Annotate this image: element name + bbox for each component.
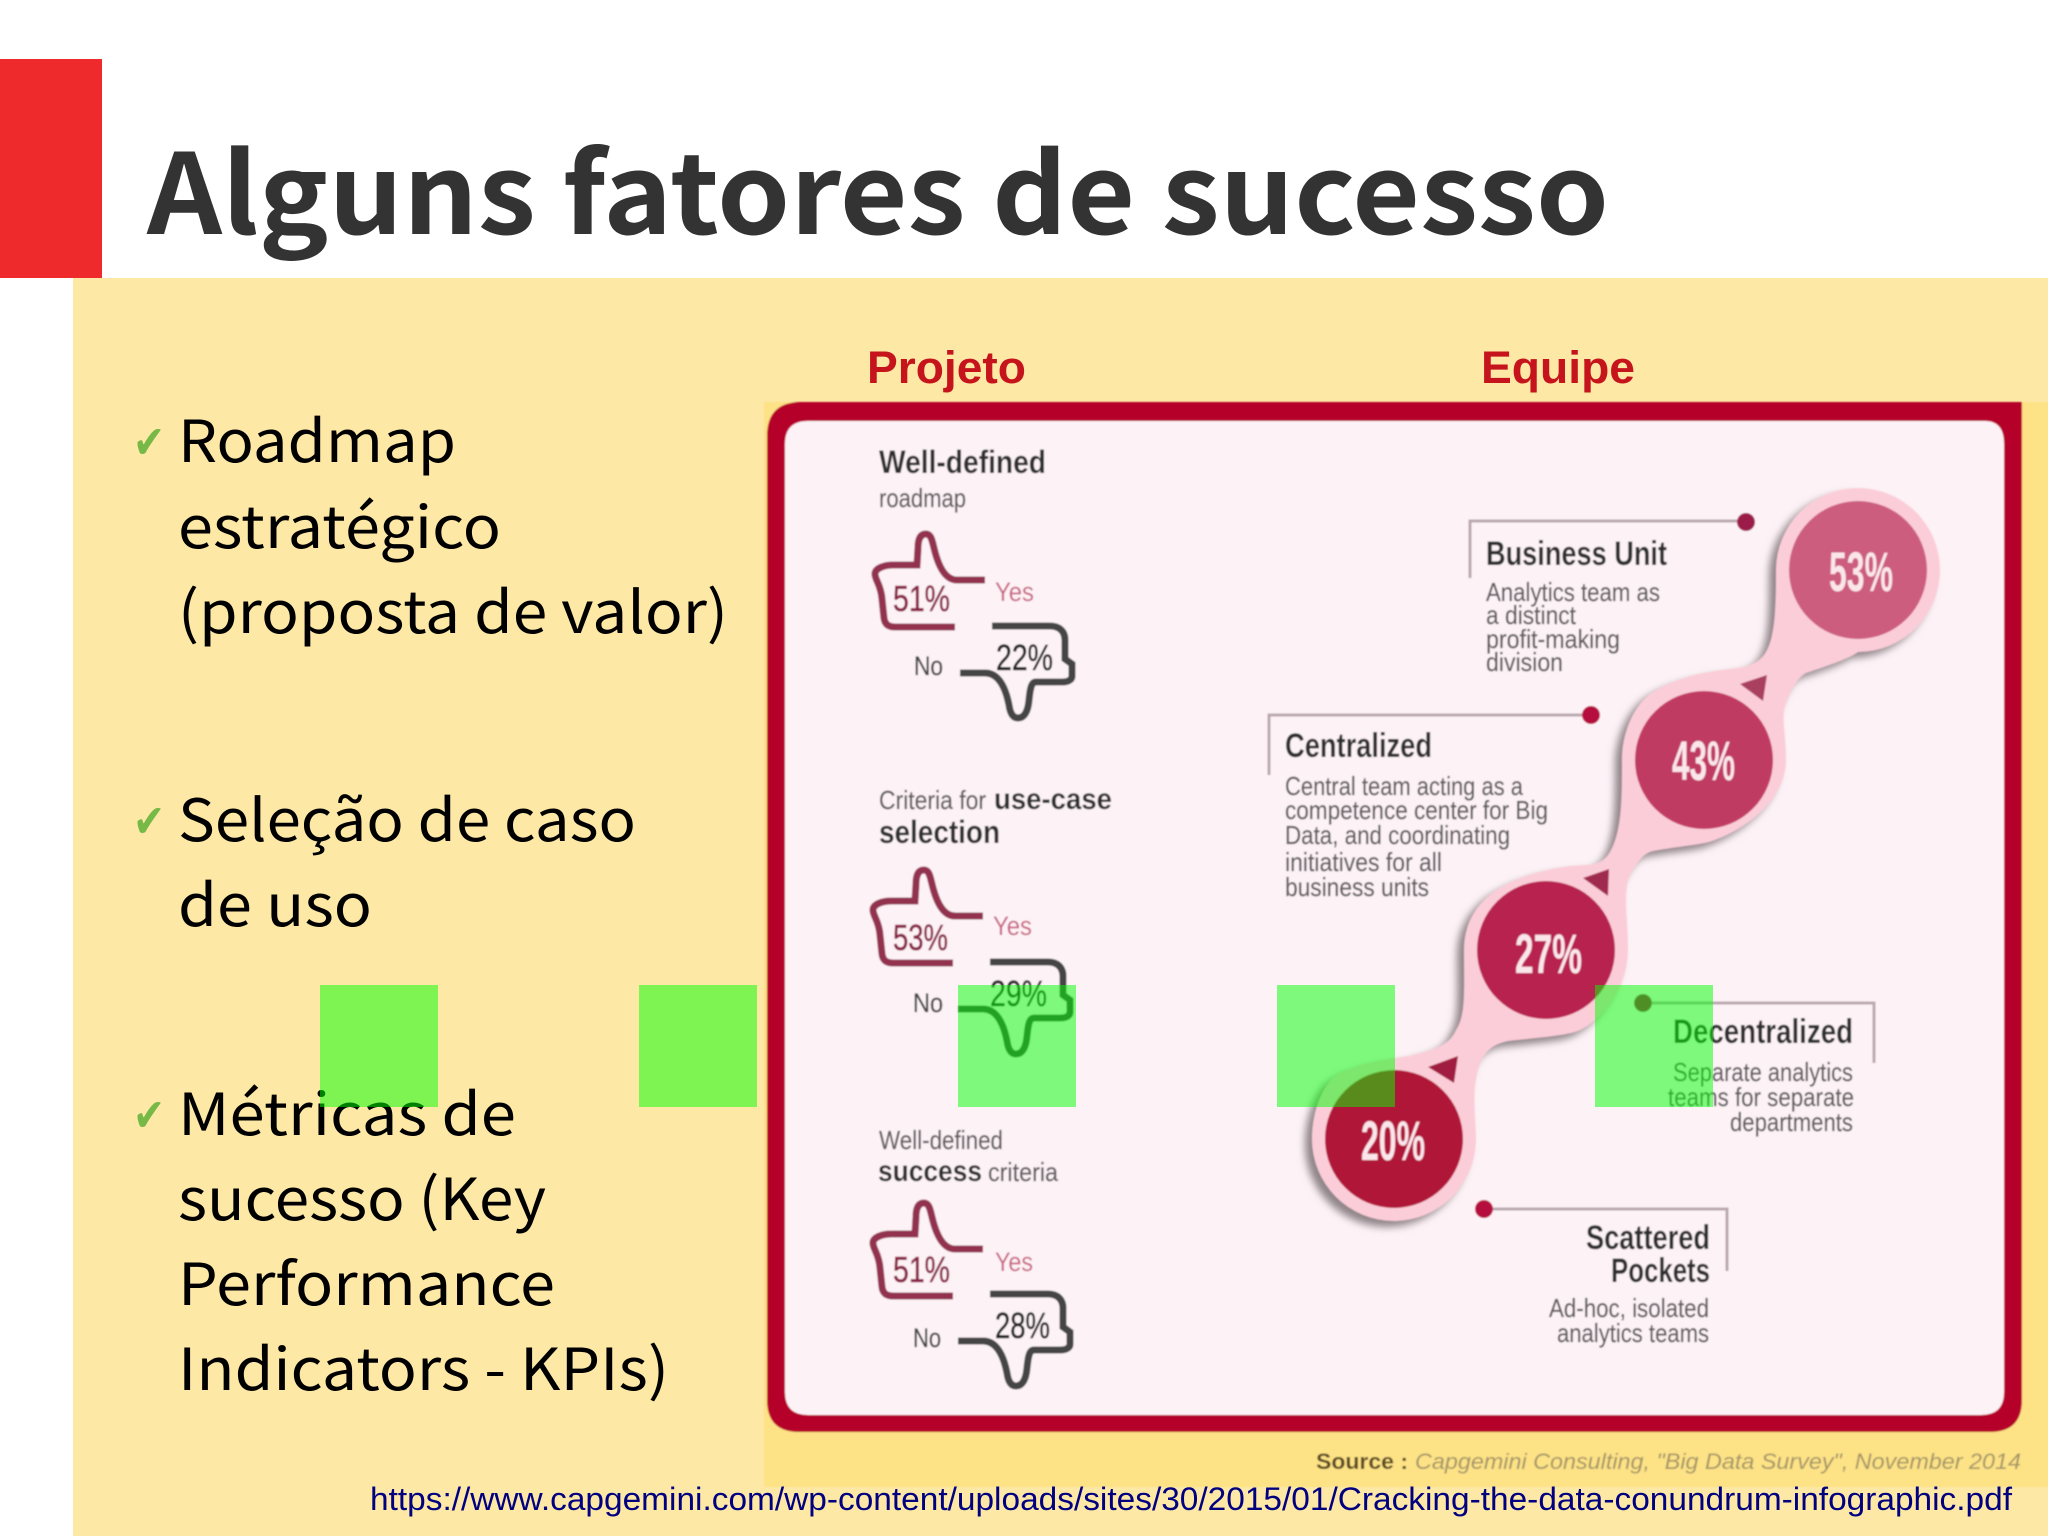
chart: success criteria: 28% bbox=[995, 1305, 1050, 1346]
title: Alguns fatores de sucesso bbox=[146, 105, 1609, 266]
chart: use-case selection criteria: Criteria for bbox=[879, 785, 986, 815]
bullet item: use case selection bbox=[133, 774, 636, 943]
bullet item: success metrics: Métricas de bbox=[178, 1068, 516, 1152]
source credit: Source : bbox=[1316, 1449, 1408, 1474]
callout: decentralized: Decentralized bbox=[1673, 1013, 1853, 1051]
callout: business unit: Business Unit bbox=[1486, 535, 1667, 573]
chart: team maturity chain: 53% bbox=[1829, 540, 1893, 603]
panel: infographic image bbox=[764, 402, 2048, 1487]
chart: use-case selection criteria: selection bbox=[879, 814, 1000, 850]
callout: scattered pockets: Pockets bbox=[1611, 1252, 1710, 1290]
chart: well-defined roadmap: No bbox=[914, 651, 943, 681]
chart: use-case selection criteria: No bbox=[913, 988, 943, 1018]
chart: well-defined roadmap: 51% bbox=[893, 578, 950, 619]
bullet item: use case selection: de uso bbox=[178, 859, 372, 943]
chart: use-case selection criteria: 53% bbox=[893, 917, 948, 958]
callout: centralized: competence center for Big bbox=[1285, 795, 1548, 825]
callout: business unit: a distinct bbox=[1486, 600, 1577, 630]
callout: decentralized: teams for separate bbox=[1668, 1082, 1854, 1112]
source credit: Capgemini Consulting, "Big Data Survey", November 2014 bbox=[1415, 1449, 2021, 1474]
chart: success criteria: Yes bbox=[995, 1247, 1033, 1277]
chart: well-defined roadmap: roadmap bbox=[879, 483, 966, 513]
bullet item: roadmap: ✔ bbox=[133, 415, 165, 469]
callout: scattered pockets bbox=[1475, 1200, 1727, 1348]
callout: decentralized: Separate analytics bbox=[1673, 1057, 1853, 1087]
chart: team maturity chain: 43% bbox=[1672, 729, 1735, 792]
chart: team maturity chain: 27% bbox=[1515, 922, 1582, 985]
chart: use-case selection criteria: Yes bbox=[993, 911, 1032, 941]
column heading: Projeto: Projeto bbox=[867, 342, 1026, 393]
chart: success criteria: Well-defined bbox=[879, 1125, 1003, 1155]
chart: success criteria bbox=[873, 1125, 1070, 1386]
chart: use-case selection criteria: use-case bbox=[994, 783, 1112, 816]
bullet item: success metrics bbox=[133, 1068, 669, 1407]
callout: centralized: Centralized bbox=[1285, 727, 1432, 765]
bullet item: success metrics: ✔ bbox=[133, 1088, 165, 1142]
source url: https://www.capgemini.com/wp-content/uploads/sites/30/2015/01/Cracking-the-data-conundrum-infographic.pdf bbox=[370, 1481, 2012, 1517]
bullet item: success metrics: sucesso (Key bbox=[178, 1153, 546, 1237]
callout: centralized: initiatives for all bbox=[1285, 847, 1442, 877]
bullet item: success metrics: Indicators - KPIs) bbox=[178, 1323, 669, 1407]
chart: success criteria: No bbox=[913, 1323, 941, 1353]
red accent block bbox=[0, 59, 102, 278]
callout: business unit: Analytics team as bbox=[1486, 577, 1660, 607]
chart: well-defined roadmap: 22% bbox=[996, 637, 1053, 678]
callout: decentralized bbox=[1634, 994, 1874, 1137]
chart: team maturity chain bbox=[1305, 488, 1940, 1227]
chart: success criteria: criteria bbox=[988, 1157, 1058, 1187]
callout: centralized: Central team acting as a bbox=[1285, 771, 1523, 801]
callout: decentralized: departments bbox=[1730, 1107, 1853, 1137]
callout: centralized bbox=[1269, 706, 1600, 902]
chart: team maturity chain: 20% bbox=[1361, 1109, 1425, 1172]
callout: business unit: division bbox=[1486, 647, 1563, 677]
content background panel bbox=[73, 278, 2048, 1536]
chart: use-case selection criteria bbox=[873, 783, 1112, 1054]
callout: scattered pockets: analytics teams bbox=[1557, 1318, 1709, 1348]
bullet item: roadmap: estratégico bbox=[178, 481, 501, 565]
callout: business unit: profit-making bbox=[1486, 624, 1620, 654]
callout: business unit bbox=[1470, 513, 1755, 677]
panel: success factors list bbox=[133, 395, 728, 1407]
bullet item: success metrics: Performance bbox=[178, 1238, 555, 1322]
chart: success criteria: success bbox=[878, 1155, 982, 1188]
green overlay squares bbox=[320, 985, 1713, 1107]
chart: well-defined roadmap: Well-defined bbox=[879, 444, 1046, 480]
bullet item: roadmap: Roadmap bbox=[178, 395, 456, 479]
chart: well-defined roadmap: Yes bbox=[995, 577, 1034, 607]
chart: success criteria: 51% bbox=[893, 1249, 950, 1290]
chart: use-case selection criteria: 29% bbox=[990, 973, 1047, 1014]
bullet item: roadmap: (proposta de valor) bbox=[178, 566, 728, 650]
callout: centralized: business units bbox=[1285, 872, 1429, 902]
bullet item: use case selection: ✔ bbox=[133, 794, 165, 848]
callout: scattered pockets: Scattered bbox=[1586, 1219, 1710, 1257]
callout: scattered pockets: Ad-hoc, isolated bbox=[1549, 1293, 1709, 1323]
bullet item: roadmap bbox=[133, 395, 728, 650]
chart: well-defined roadmap bbox=[875, 444, 1072, 718]
callout: centralized: Data, and coordinating bbox=[1285, 820, 1510, 850]
bullet item: use case selection: Seleção de caso bbox=[178, 774, 636, 858]
column heading: Equipe: Equipe bbox=[1481, 342, 1635, 393]
